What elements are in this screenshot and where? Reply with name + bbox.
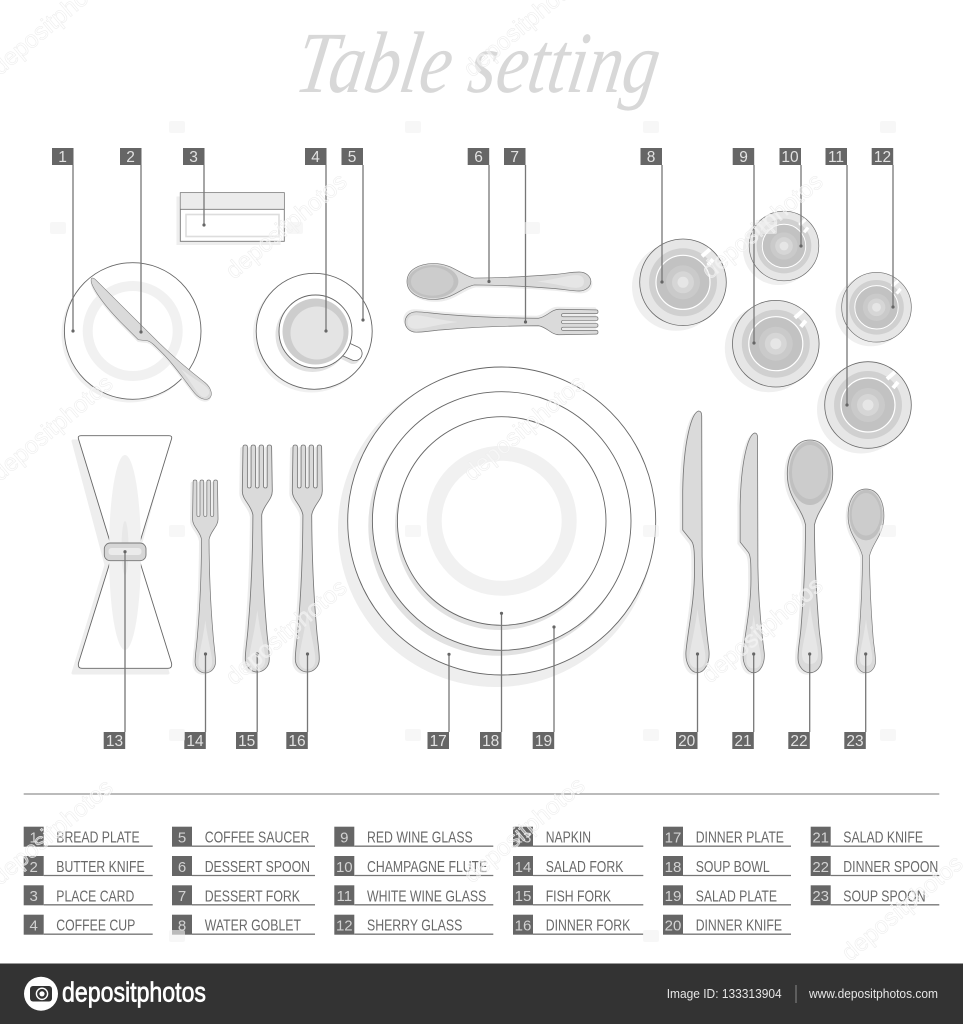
legend item 16 (513, 915, 643, 935)
legend item 21 (811, 827, 939, 847)
stock watermark overlay: depositphotos (459, 772, 590, 889)
legend item 1: 1 (30, 830, 38, 846)
illustration: salad knife (737, 433, 764, 675)
legend item 13: 13 (515, 830, 531, 846)
legend item 9 (334, 827, 493, 847)
callout 12 (872, 148, 895, 309)
legend item 17: DINNER PLATE (696, 830, 784, 847)
legend item 14: 14 (515, 859, 531, 876)
image id: Image ID: 133313904 (667, 987, 782, 1001)
callout 8: 8 (647, 149, 655, 166)
legend item 10: 10 (336, 859, 353, 876)
footer bar (0, 964, 963, 1024)
callout 20 (676, 652, 699, 750)
callout 12: 12 (874, 149, 891, 166)
callout 16 (286, 652, 309, 750)
footer logo: depositphotos (62, 976, 206, 1008)
footer separator (795, 985, 797, 1003)
illustration: place card (176, 193, 284, 245)
callout 21: 21 (734, 733, 752, 750)
legend item 23: SOUP SPOON (843, 888, 926, 905)
illustration: dinner fork (289, 445, 322, 674)
legend item 22 (811, 856, 939, 876)
legend item 6: DESSERT SPOON (205, 859, 310, 876)
legend item 4: COFFEE CUP (56, 918, 135, 935)
illustration: red wine glass (725, 300, 819, 392)
legend item 20: DINNER KNIFE (696, 918, 782, 935)
legend item 4 (24, 915, 153, 935)
legend item 2 (24, 856, 153, 876)
callout 22: 22 (790, 733, 808, 750)
callout 3 (183, 148, 206, 227)
legend item 3: 3 (30, 888, 38, 905)
legend item 16: DINNER FORK (546, 918, 631, 935)
legend item 12: 12 (336, 918, 353, 934)
legend item 14: SALAD FORK (546, 859, 624, 876)
callout 7: 7 (510, 149, 519, 166)
legend item 6: 6 (178, 859, 186, 876)
illustration: dessert spoon (407, 264, 592, 302)
illustration: coffee saucer (253, 273, 372, 392)
callout 13: 13 (106, 733, 123, 750)
callout 14 (184, 652, 207, 750)
legend item 12 (334, 915, 493, 935)
callout 19 (533, 625, 556, 750)
legend item 22: 22 (812, 859, 829, 876)
illustration: napkin (73, 436, 172, 673)
callout 1: 1 (58, 149, 67, 166)
stock watermark overlay: depositphotos (221, 574, 352, 691)
callout 22 (788, 652, 811, 750)
legend item 23: 23 (812, 888, 829, 905)
stock watermark overlay: depositphotos (459, 370, 590, 487)
callout 9 (733, 148, 756, 345)
legend item 7 (172, 885, 315, 905)
legend item 8: 8 (178, 918, 186, 934)
illustration: soup spoon (846, 489, 884, 674)
legend item 19: SALAD PLATE (696, 888, 777, 905)
callout 4: 4 (311, 149, 320, 166)
legend item 11: WHITE WINE GLASS (367, 888, 486, 905)
illustration: champagne flute (743, 211, 819, 285)
legend item 20: 20 (665, 918, 681, 934)
legend item 11: 11 (337, 888, 352, 905)
footer logo (24, 976, 206, 1011)
illustration: dinner knife (680, 411, 709, 675)
legend divider (24, 793, 939, 795)
callout 5 (342, 148, 365, 322)
legend item 12: SHERRY GLASS (367, 918, 462, 935)
callout 15: 15 (238, 733, 255, 750)
legend item 22: DINNER SPOON (843, 859, 938, 876)
legend item 5: COFFEE SAUCER (205, 830, 309, 847)
callout 9: 9 (739, 149, 748, 166)
legend item 2: 2 (30, 859, 38, 876)
legend item 14 (513, 856, 643, 876)
legend item 3 (24, 885, 153, 905)
callout 2: 2 (126, 149, 135, 166)
illustration: water goblet (632, 239, 726, 331)
illustration: white wine glass (817, 362, 911, 454)
legend item 17: 17 (665, 830, 681, 846)
legend item 19: 19 (665, 888, 681, 905)
legend item 5: 5 (178, 830, 186, 846)
legend item 2: BUTTER KNIFE (56, 859, 145, 876)
callout 5: 5 (348, 149, 356, 166)
callout 6 (468, 148, 491, 283)
legend item 8: WATER GOBLET (205, 918, 301, 935)
legend item 21: SALAD KNIFE (843, 830, 923, 847)
callout 17 (428, 653, 451, 750)
legend item 18 (663, 856, 791, 876)
legend item 17 (663, 827, 791, 847)
legend item 18: SOUP BOWL (696, 859, 770, 876)
legend item 23 (811, 885, 939, 905)
legend item 8 (172, 915, 315, 935)
illustration: fish fork (239, 445, 272, 674)
legend item 9: RED WINE GLASS (367, 830, 473, 847)
illustration: bread plate (62, 263, 201, 402)
legend item 10: CHAMPAGNE FLUTE (367, 859, 487, 876)
illustration: sherry glass (835, 272, 911, 346)
callout 3: 3 (189, 149, 198, 166)
callout 10: 10 (781, 149, 799, 166)
legend item 4: 4 (30, 918, 38, 934)
callout 23 (844, 652, 867, 750)
callout 16: 16 (288, 733, 306, 750)
callout 4 (305, 148, 328, 333)
legend item 20 (663, 915, 791, 935)
callout 23: 23 (846, 733, 864, 750)
callout 11: 11 (828, 149, 844, 166)
legend item 13: NAPKIN (546, 830, 591, 847)
legend item 19 (663, 885, 791, 905)
legend item 1 (24, 827, 153, 847)
legend item 13 (513, 827, 643, 847)
legend (24, 827, 939, 935)
callout 14: 14 (186, 733, 204, 750)
callout 2 (120, 148, 143, 334)
website url: www.depositphotos.com (808, 987, 938, 1001)
illustration: dessert fork (403, 307, 598, 335)
legend item 9: 9 (340, 830, 348, 846)
legend item 11 (334, 885, 493, 905)
illustration: coffee cup (276, 295, 355, 372)
callout 18 (480, 612, 503, 750)
callout 10 (780, 148, 803, 248)
legend item 16: 16 (515, 918, 531, 934)
legend item 1: BREAD PLATE (56, 830, 140, 847)
legend item 5 (172, 827, 315, 847)
callout 17: 17 (430, 733, 447, 750)
callout 6: 6 (474, 149, 483, 166)
callout 18: 18 (482, 733, 499, 750)
legend item 3: PLACE CARD (56, 888, 134, 905)
legend item 10 (334, 856, 493, 876)
stock watermark overlay: depositphotos (221, 168, 352, 285)
legend item 21: 21 (812, 830, 829, 846)
legend item 7: DESSERT FORK (205, 888, 301, 905)
legend item 15 (513, 885, 643, 905)
callout 21 (732, 652, 755, 750)
legend item 15: FISH FORK (546, 888, 612, 905)
callout 15 (236, 652, 259, 750)
callout 7 (504, 148, 527, 324)
callout 13 (104, 550, 127, 750)
illustration: dinner plate, soup bowl and salad plate (338, 367, 656, 687)
callout 11 (826, 148, 849, 407)
illustration: dinner spoon (784, 440, 833, 675)
callout 8 (640, 148, 664, 284)
illustration: salad fork (190, 480, 218, 675)
stock watermark overlay: depositphotos (697, 572, 828, 689)
legend item 15: 15 (515, 888, 531, 905)
stock watermark overlay: depositphotos (697, 168, 828, 285)
callout 19: 19 (535, 733, 552, 750)
callout 1 (52, 148, 75, 333)
callout 20: 20 (678, 733, 696, 750)
legend item 6 (172, 856, 315, 876)
title: Table setting (290, 14, 667, 111)
legend item 7: 7 (178, 888, 186, 905)
legend item 18: 18 (665, 859, 681, 876)
illustration: butter knife (83, 274, 216, 407)
